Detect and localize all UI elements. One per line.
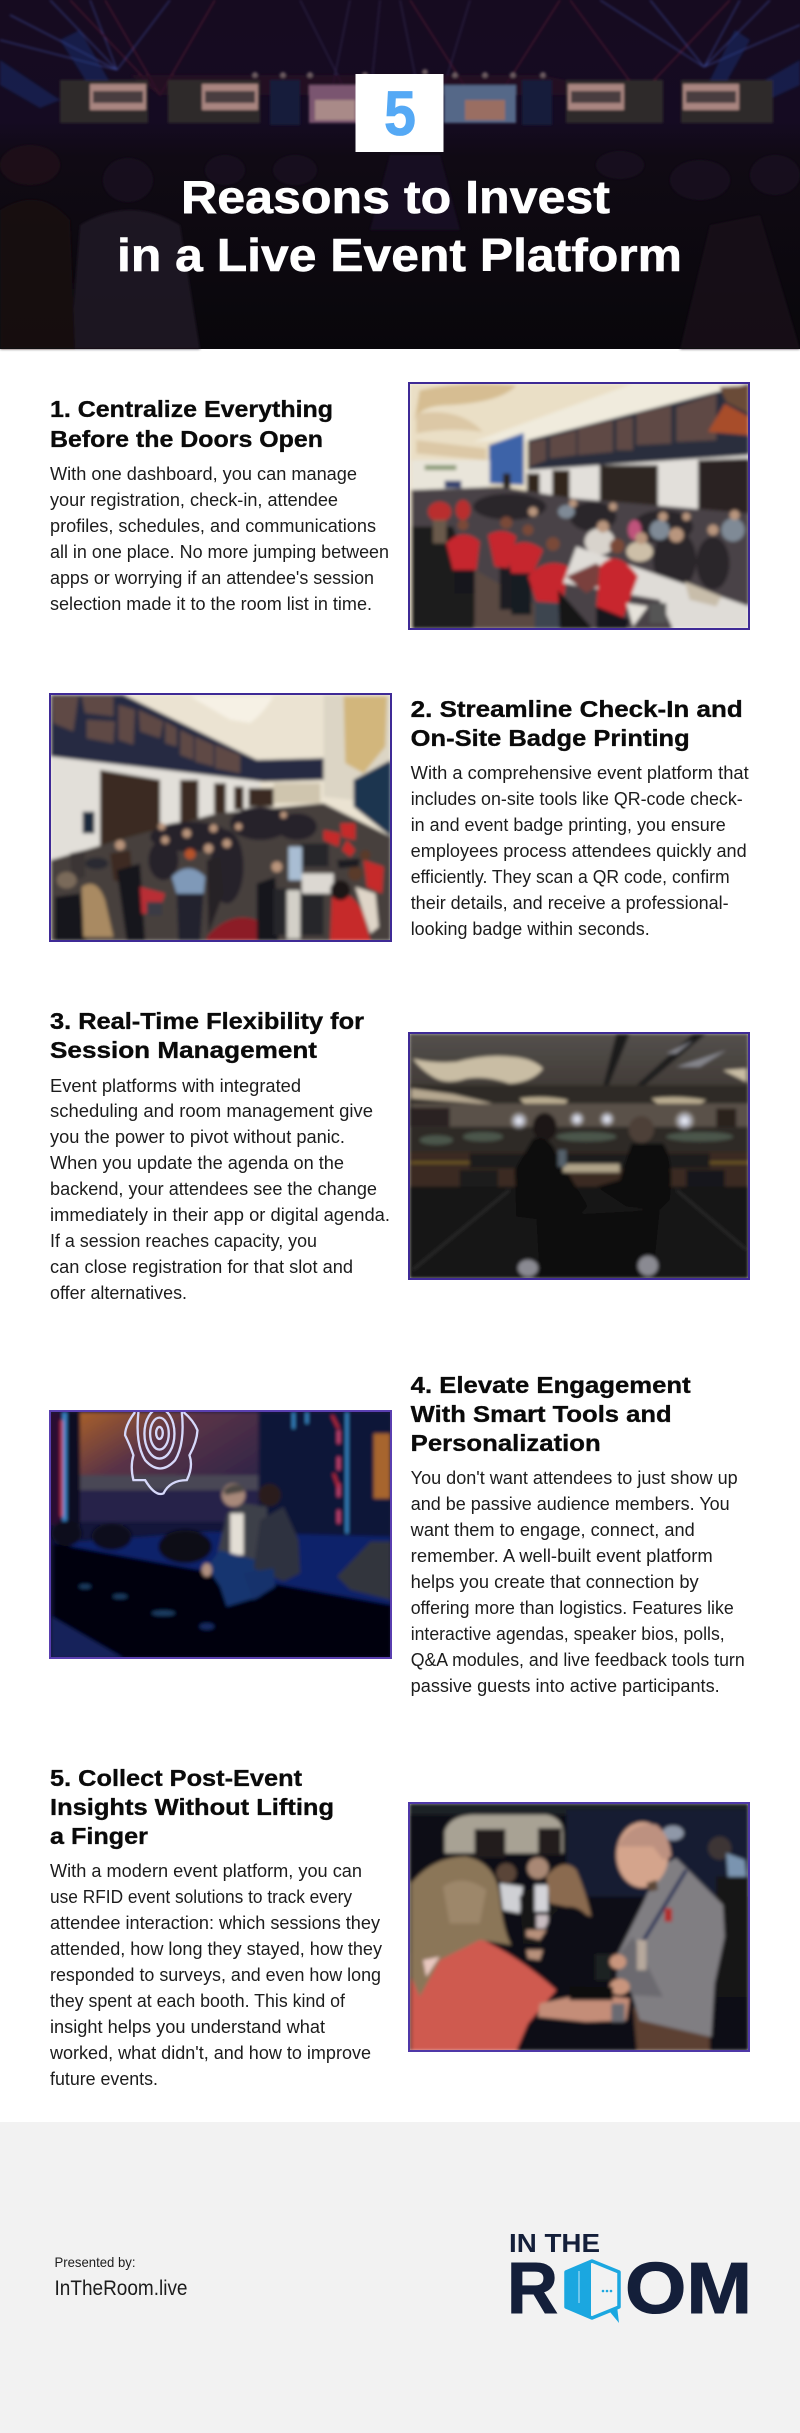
audience silhouettes — [0, 145, 800, 349]
body text 3: immediately in their app or digital agenda. — [50, 1205, 390, 1225]
body text 4: remember. A well-built event platform — [411, 1546, 713, 1566]
body text 2: in and event badge printing, you ensure — [411, 815, 726, 835]
body text 2: includes on-site tools like QR-code check- — [411, 789, 743, 809]
panel: reason 2 — [50, 694, 749, 941]
body text 5: use RFID event solutions to track every — [50, 1887, 352, 1907]
heading 1: Before the Doors Open — [50, 426, 323, 452]
heading 3: Session Management — [50, 1037, 317, 1063]
background photo: laser lights and stage — [0, 0, 800, 349]
presented by credit: Presented by: — [54, 2254, 136, 2270]
staff shirts — [446, 531, 568, 603]
panel: reason 1 — [50, 383, 749, 629]
staff — [324, 823, 384, 941]
heading 4 — [411, 1372, 691, 1456]
footer band — [0, 2122, 800, 2433]
body text 5: With a modern event platform, you can — [50, 1861, 362, 1881]
logo: In The Room: IN THE — [509, 2228, 600, 2258]
body text 2: employees process attendees quickly and — [411, 841, 747, 861]
presented by credit: InTheRoom.live — [54, 2277, 188, 2300]
panel: reason 3 — [50, 1008, 749, 1303]
body text 5: insight helps you understand what — [50, 2017, 325, 2037]
heading 1 — [50, 396, 333, 452]
title: in a Live Event Platform — [117, 229, 682, 281]
body text 1: your registration, check-in, attendee — [50, 490, 338, 510]
body text 4: want them to engage, connect, and — [410, 1520, 695, 1540]
heading 2: 2. Streamline Check-In and — [411, 696, 743, 722]
heading 2: On-Site Badge Printing — [411, 725, 690, 751]
heading 5: 5. Collect Post-Event — [50, 1765, 302, 1791]
body text 1: profiles, schedules, and communications — [50, 516, 376, 536]
heading 3 — [50, 1008, 364, 1063]
body text 3: you the power to pivot without panic. — [50, 1127, 345, 1147]
logo: In The Room: R — [507, 2249, 558, 2329]
panel: reason 4 — [50, 1372, 745, 1696]
icon: door speech bubble — [566, 2261, 619, 2323]
body text 3: If a session reaches capacity, you — [50, 1231, 317, 1251]
body text 4: You don't want attendees to just show up — [411, 1468, 738, 1488]
presented by credit — [54, 2254, 188, 2300]
body text 5: they spent at each booth. This kind of — [50, 1991, 346, 2011]
number badge — [356, 74, 444, 152]
body text 4: offering more than logistics. Features like — [411, 1598, 734, 1618]
logo: In The Room: OM — [625, 2249, 752, 2329]
body text 4: Q&A modules, and live feedback tools turn — [411, 1650, 745, 1670]
bags and carpet — [411, 527, 480, 629]
heading 4: Personalization — [411, 1430, 601, 1456]
header banner — [0, 0, 800, 349]
lanyards rack — [300, 843, 329, 867]
heading 5: Insights Without Lifting — [50, 1794, 334, 1820]
heading 4: With Smart Tools and — [411, 1401, 672, 1427]
body text 5 — [49, 1861, 382, 2089]
photo: two speakers on stage — [50, 1409, 391, 1658]
presenters silhouette — [515, 1113, 671, 1276]
body text 4 — [410, 1468, 745, 1696]
body text 3: offer alternatives. — [50, 1283, 187, 1303]
photo: check-in lobby — [50, 694, 391, 941]
body text 3: When you update the agenda on the — [50, 1153, 344, 1173]
heading 3: 3. Real-Time Flexibility for — [50, 1008, 364, 1034]
body text 4: interactive agendas, speaker bios, polls, — [411, 1624, 725, 1644]
heading 1: 1. Centralize Everything — [50, 396, 333, 422]
heading 5 — [50, 1765, 334, 1849]
body text 1: selection made it to the room list in time. — [50, 594, 372, 614]
man in grey sweater — [633, 2007, 710, 2051]
body text 2: their details, and receive a professional- — [411, 893, 729, 913]
body text 5: attendee interaction: which sessions they — [50, 1913, 380, 1933]
body text 4: passive guests into active participants. — [411, 1676, 720, 1696]
body text 5: attended, how long they stayed, how they — [50, 1939, 382, 1959]
photo: attendee using device with staff — [409, 1803, 749, 2051]
body text 1: all in one place. No more jumping between — [50, 542, 389, 562]
body text 2: With a comprehensive event platform that — [411, 763, 749, 783]
photo: staff at registration desk — [409, 383, 749, 629]
heading 4: 4. Elevate Engagement — [411, 1372, 691, 1398]
woman in red shirt — [411, 1938, 556, 2051]
body text 5: worked, what didn't, and how to improve — [49, 2043, 371, 2063]
body text 3: scheduling and room management give — [50, 1101, 373, 1121]
heading 5: a Finger — [50, 1823, 148, 1849]
body text 1 — [50, 464, 389, 614]
body text 4: helps you create that connection by — [411, 1572, 699, 1592]
body text 2: efficiently. They scan a QR code, confirm — [411, 867, 730, 887]
number badge: 5 — [384, 79, 416, 149]
body text 2: looking badge within seconds. — [411, 919, 650, 939]
logo: In The Room — [507, 2228, 752, 2329]
neon gear logo — [125, 1409, 197, 1494]
desk — [563, 547, 749, 629]
body text 3: backend, your attendees see the change — [50, 1179, 377, 1199]
photo: ballroom from the stage — [409, 1033, 749, 1279]
body text 3 — [50, 1076, 390, 1303]
panel: reason 5 — [49, 1765, 749, 2089]
body text 5: future events. — [50, 2069, 158, 2089]
body text 1: apps or worrying if an attendee's session — [50, 568, 374, 588]
stage screens — [60, 80, 773, 125]
body text 1: With one dashboard, you can manage — [50, 464, 357, 484]
background attendees — [496, 1863, 516, 1883]
title — [117, 171, 682, 281]
body text 4: and be passive audience members. You — [411, 1494, 730, 1514]
title: Reasons to Invest — [181, 171, 610, 223]
crowd — [473, 493, 730, 590]
heading 2 — [411, 696, 743, 751]
body text 3: can close registration for that slot and — [50, 1257, 353, 1277]
body text 5: responded to surveys, and even how long — [50, 1965, 381, 1985]
body text 3: Event platforms with integrated — [50, 1076, 301, 1096]
body text 2 — [411, 763, 749, 939]
